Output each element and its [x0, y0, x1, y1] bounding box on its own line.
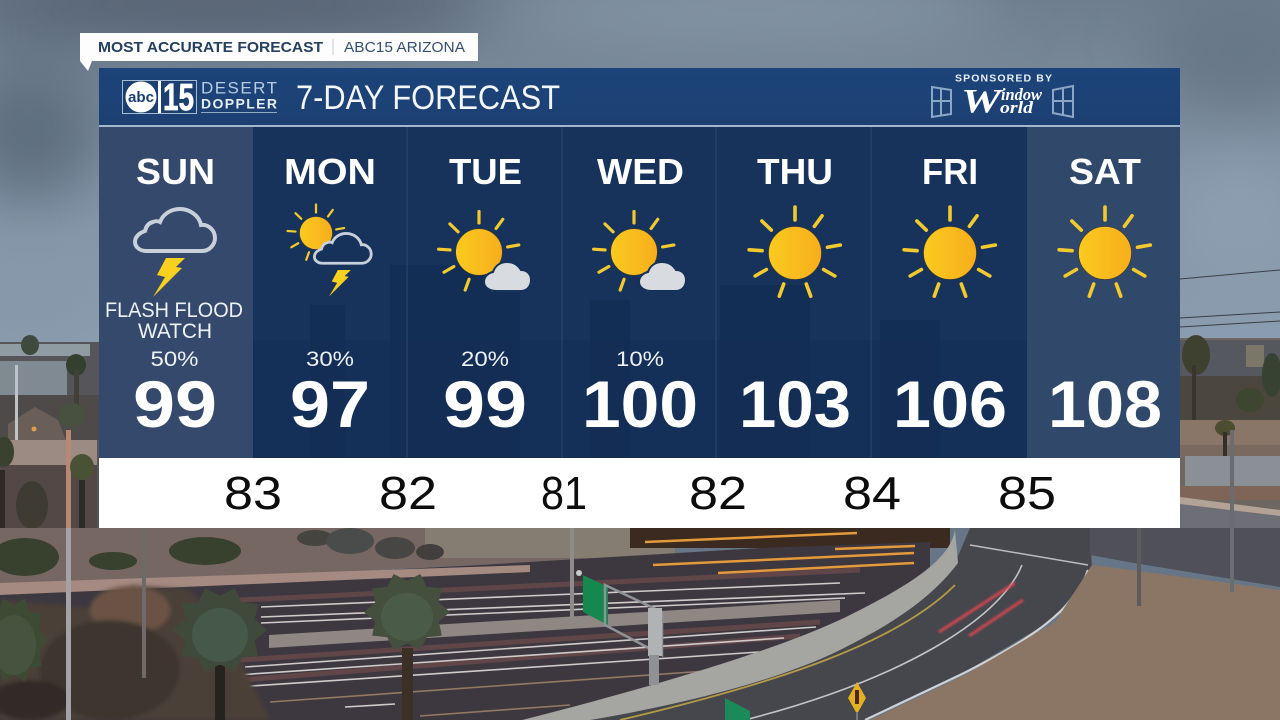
highlight column: Sunday	[99, 127, 253, 458]
day: TUE: 20%	[461, 348, 509, 371]
day: SUN: SUN	[136, 151, 215, 192]
alert: flash flood watch	[105, 299, 243, 343]
panel: overnight lows strip: 85	[998, 467, 1056, 519]
day: SAT	[1048, 151, 1162, 441]
panel: overnight lows strip: 82	[379, 467, 437, 519]
icon: sunny	[904, 207, 995, 296]
background photo: dirt hillside	[0, 528, 640, 588]
day: THU: 103	[739, 367, 851, 441]
icon: red tail light streaks	[939, 583, 1023, 636]
background photo: left neighbourhood	[0, 335, 100, 530]
panel: overnight lows strip: 82	[689, 467, 747, 519]
logo: abc15 desert doppler: DESERT	[201, 78, 277, 98]
background photo: right neighbourhood	[1180, 335, 1280, 530]
background photo: dirt lot	[870, 565, 1280, 720]
sponsor: window world: W	[961, 83, 1005, 120]
top tab: most accurate forecast: MOST ACCURATE FORECAST	[98, 39, 323, 56]
day: MON	[284, 151, 376, 441]
road sign: yellow merge sign	[848, 682, 866, 720]
day: WED: 100	[582, 367, 698, 441]
sponsor: window world: SPONSORED BY	[955, 72, 1052, 84]
panel: overnight lows strip: 81	[541, 467, 587, 519]
icon: mostly sunny	[594, 212, 686, 291]
day: FRI: FRI	[922, 151, 978, 192]
background photo: upper right road	[1090, 528, 1280, 587]
day: TUE: TUE	[449, 151, 522, 192]
alert: flash flood watch: FLASH FLOOD	[105, 299, 243, 322]
icon: sun behind storm cloud	[288, 204, 371, 297]
day: SAT: SAT	[1069, 151, 1141, 192]
day: WED: WED	[597, 151, 684, 192]
sponsor: window world: indow	[1001, 85, 1043, 104]
icon: sunny	[1059, 207, 1150, 296]
day: THU	[739, 151, 851, 441]
panel: overnight lows strip: 84	[843, 467, 901, 519]
day: TUE: 99	[443, 367, 527, 441]
logo: abc15 desert doppler: DOPPLER	[201, 96, 277, 112]
day: FRI	[893, 151, 1007, 441]
day: TUE	[439, 151, 531, 441]
day: THU: THU	[757, 151, 833, 192]
background photo: concrete barrier	[522, 530, 958, 720]
day: SUN: 50%	[150, 348, 198, 371]
day: MON: 30%	[306, 348, 354, 371]
day: SAT: 108	[1048, 367, 1162, 441]
day: WED	[582, 151, 698, 441]
logo: abc15 desert doppler: abc	[128, 89, 154, 106]
icon: sunny	[749, 207, 840, 296]
background photo: scrub trees	[0, 585, 270, 720]
panel: overnight lows strip: 83	[224, 467, 282, 519]
sponsor: window world	[932, 72, 1073, 120]
panel: overnight lows strip	[99, 458, 1180, 528]
icon: mostly sunny	[439, 212, 531, 291]
overhead freeway sign	[572, 528, 662, 685]
logo: abc15 desert doppler: 15	[163, 77, 194, 119]
panel faint skyline	[253, 265, 1027, 458]
day: SUN	[105, 151, 243, 441]
day: WED: 10%	[616, 348, 664, 371]
background photo: palm trees	[0, 574, 450, 720]
road sign: green sign lower	[725, 698, 750, 720]
day: SUN: 99	[133, 367, 217, 441]
alert: flash flood watch: WATCH	[138, 320, 212, 343]
background photo: poles	[66, 430, 1234, 720]
sponsor: window world: orld	[1000, 98, 1034, 117]
top tab: most accurate forecast	[80, 33, 478, 71]
background photo: stormy sky	[0, 0, 1280, 345]
top tab: most accurate forecast: ABC15 ARIZONA	[344, 39, 465, 56]
day: FRI: 106	[893, 367, 1007, 441]
background photo: shrubs on hillside	[0, 528, 444, 576]
logo: abc15 desert doppler	[122, 77, 277, 119]
panel: header bar	[99, 68, 1180, 127]
title: 7-DAY FORECAST	[296, 79, 560, 117]
day: MON: 97	[290, 367, 370, 441]
day: MON: MON	[284, 151, 376, 192]
panel: forecast body	[99, 127, 1180, 458]
highlight column: Saturday	[1027, 127, 1180, 458]
icon: thunderstorm cloud	[135, 209, 215, 297]
background photo: freeway and ramp	[0, 528, 1092, 720]
